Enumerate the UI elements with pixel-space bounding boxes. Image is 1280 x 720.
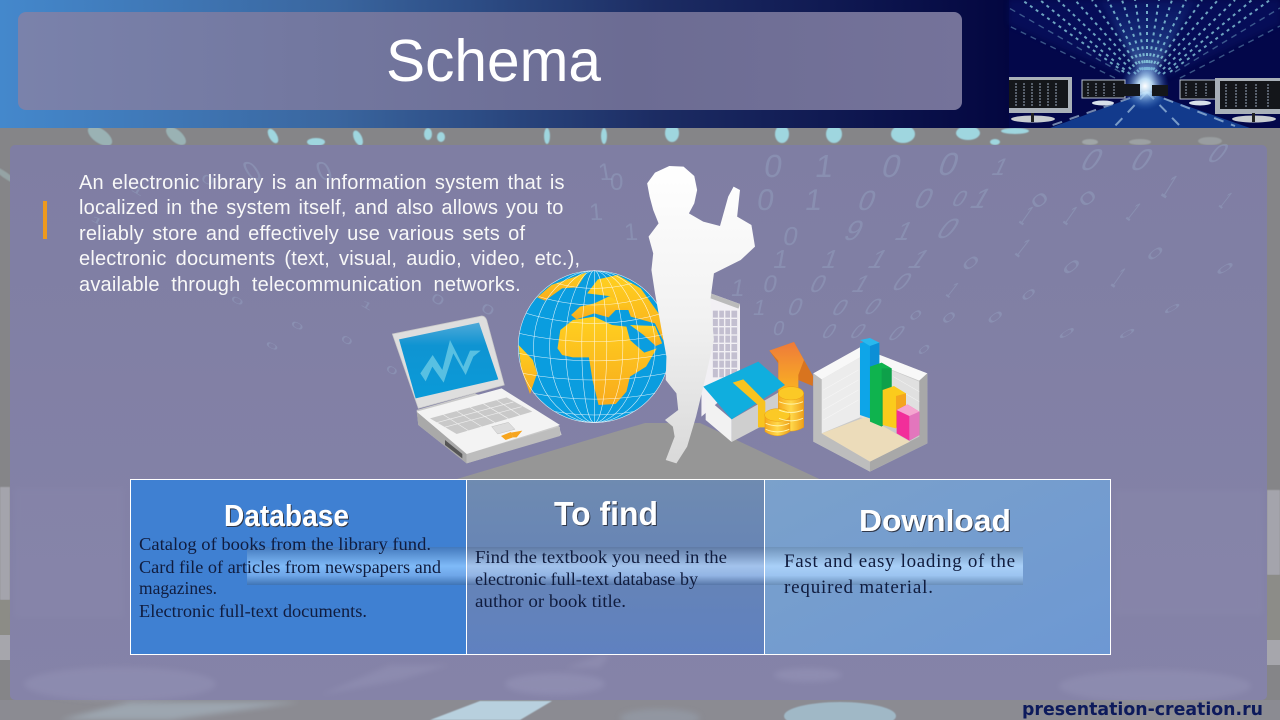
- text: Database details: Catalog of books from the library fund.: [139, 534, 431, 554]
- icon: 3D bar chart: [813, 338, 927, 472]
- pedestal: [440, 423, 830, 484]
- panel: content background: 0: [907, 307, 925, 324]
- panel: content background: 1: [359, 298, 375, 313]
- panel: content background: 0: [886, 268, 918, 295]
- panel: content background: 1: [1121, 197, 1146, 227]
- panel: content background: 0: [1075, 186, 1100, 211]
- panel: content background: 1: [863, 245, 894, 274]
- panel: content background: 0: [827, 296, 853, 321]
- text: Database details: [139, 534, 441, 621]
- panel: content background: 0: [428, 290, 447, 309]
- watermark: presentation-creation.ru: [1022, 699, 1263, 720]
- panel: content background: 1: [751, 295, 768, 320]
- text: To find details: Find the textbook you need in the: [475, 547, 727, 567]
- table: three columns: [130, 479, 1110, 654]
- panel: content background: 0: [1201, 140, 1235, 168]
- panel: content background: 0: [289, 318, 305, 333]
- panel: content background: 0: [229, 293, 245, 308]
- panel: content background: 0: [781, 221, 801, 251]
- title: Schema: [386, 28, 601, 94]
- panel: content background: 0: [478, 300, 497, 319]
- panel: content background: 0: [960, 252, 983, 274]
- panel: content background: 0: [854, 186, 880, 217]
- panel: content background: 0: [755, 184, 776, 217]
- panel: content background: 1: [588, 199, 604, 226]
- panel: content background: 1: [1010, 232, 1036, 263]
- panel: content background: 1: [1214, 188, 1236, 214]
- panel: content background: 1: [89, 213, 105, 228]
- text: To find details: electronic full-text database by: [475, 569, 698, 589]
- panel: content background: 1: [729, 275, 747, 302]
- text block: description: reliably store and effectively use various sets of: [79, 223, 525, 245]
- column: Download background: [764, 479, 1110, 654]
- panel: content background: 1: [964, 184, 997, 214]
- panel: content background: 1: [941, 278, 962, 304]
- panel: content background: 0: [762, 148, 785, 184]
- panel: content background: 0: [1144, 243, 1166, 264]
- panel: content background: 0: [1057, 325, 1077, 341]
- text: To find details: [475, 547, 727, 611]
- panel: content background: 0: [198, 171, 217, 189]
- panel: content background: 0: [1214, 259, 1236, 278]
- panel: content background: 0: [339, 333, 355, 348]
- panel: content background: 1: [847, 272, 875, 298]
- text block: description: An electronic library is an information system that is: [79, 172, 565, 194]
- panel: content background: 0: [761, 271, 780, 298]
- panel: content background: 1: [1058, 199, 1083, 231]
- panel: content background: 0: [784, 295, 807, 321]
- panel: content background: 0: [264, 339, 280, 353]
- panel: content background: 0: [1124, 143, 1160, 176]
- panel: content background: 1: [1105, 263, 1130, 295]
- panel: content background: 0: [878, 149, 905, 184]
- panel: content background: 1: [902, 246, 936, 274]
- silhouette: person with thumb up: [647, 166, 755, 463]
- panel: content background: 0: [805, 271, 831, 298]
- panel: content background: 0: [237, 157, 268, 186]
- panel: content background: 0: [985, 308, 1006, 327]
- panel: content background: 1: [771, 244, 791, 274]
- panel: content background: 1: [129, 182, 146, 198]
- highlight band: [247, 547, 1023, 585]
- icon: globe: [518, 271, 670, 423]
- panel: content background: 1: [813, 148, 836, 184]
- panel: content background: 1: [890, 216, 919, 246]
- panel: content background: 1: [803, 184, 824, 217]
- text block: description: localized in the system itself, and also allows you to: [79, 197, 564, 219]
- heading: Database: Database: [224, 498, 349, 533]
- text block: description: available through telecommunication networks.: [79, 274, 521, 296]
- panel: content background: 0: [312, 157, 337, 186]
- panel: content background: 1: [1014, 199, 1039, 231]
- panel: content background: 0: [940, 309, 959, 327]
- panel: content background: 0: [1074, 143, 1110, 176]
- table borders: [130, 480, 1110, 654]
- column: Database background: [130, 479, 466, 654]
- column: To find background: [466, 479, 764, 654]
- text: Database details: Card file of articles from newspapers and: [139, 557, 441, 577]
- icon: laptop: [392, 316, 562, 463]
- text: Database details: magazines.: [139, 578, 217, 598]
- title panel: [18, 12, 962, 110]
- heading: To find: To find: [554, 495, 658, 532]
- header bar: [0, 0, 1010, 128]
- text: To find details: author or book title.: [475, 591, 626, 611]
- panel: content background: 0: [909, 183, 939, 215]
- panel: content background: 1: [623, 219, 639, 246]
- panel: content background: 1: [1156, 168, 1183, 206]
- panel: content background: 0: [1117, 326, 1137, 341]
- icon: office building: [701, 290, 740, 417]
- panel: content background: 0: [883, 322, 911, 344]
- text: Download details: Fast and easy loading of the: [784, 551, 1015, 572]
- panel: content background: 0: [948, 186, 973, 211]
- panel: content background: 1: [987, 154, 1013, 181]
- panel: content background: 0: [1019, 285, 1038, 304]
- text block: description: [79, 172, 580, 296]
- panel: content background: 1: [818, 245, 843, 274]
- panel: content background: 0: [858, 295, 887, 319]
- panel: content background: 0: [1027, 188, 1052, 213]
- panel: content background: 0: [610, 169, 623, 196]
- header image: data rays and monitors: [1009, 0, 1280, 128]
- panel: content background: 0: [933, 147, 964, 183]
- panel: content background: [10, 140, 1267, 702]
- icon: banknotes, coins and arrow: [703, 342, 813, 442]
- panel: content background: 1: [596, 159, 614, 186]
- panel: content background: 9: [839, 215, 869, 247]
- panel: content background: 0: [384, 363, 400, 378]
- panel: content background: 0: [916, 342, 933, 358]
- text: Download details: required material.: [784, 577, 933, 598]
- text: Download details: [784, 551, 1015, 598]
- panel: content background: 0: [817, 319, 842, 343]
- panel: content background: 0: [1162, 301, 1182, 316]
- text block: description: electronic documents (text, visual, audio, video, etc.),: [79, 248, 580, 270]
- heading: Download: Download: [859, 503, 1011, 538]
- accent bar: [43, 201, 47, 239]
- panel: content background: 0: [771, 318, 787, 340]
- panel: content background: 0: [1060, 256, 1083, 278]
- text: Database details: Electronic full-text documents.: [139, 601, 367, 621]
- panel: content background: 0: [845, 320, 872, 342]
- panel: content background: 0: [930, 213, 967, 244]
